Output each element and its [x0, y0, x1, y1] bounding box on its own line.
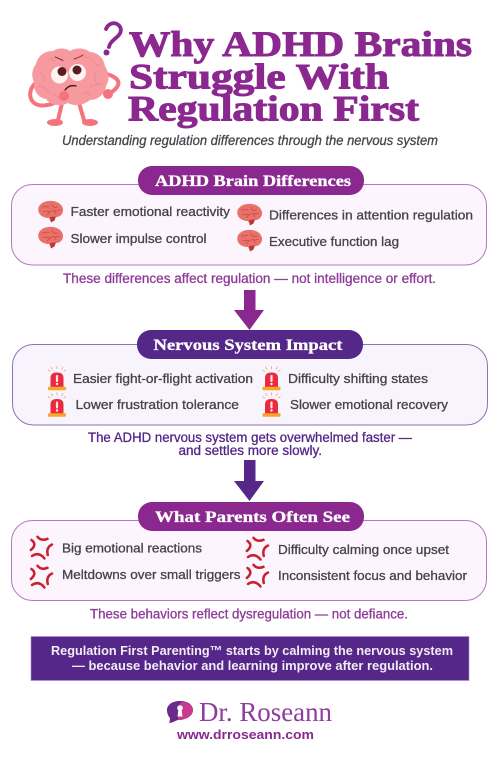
note: nervous system — [88, 430, 412, 458]
text: inconsistent focus and behavior: Inconsistent focus and behavior — [278, 568, 468, 583]
text: difficulty calming once upset: Difficulty calming once upset — [278, 542, 449, 557]
text: difficulty shifting states: Difficulty shifting states — [288, 371, 429, 386]
icon: siren — [262, 366, 280, 390]
text: meltdowns over small triggers: Meltdowns over small triggers — [62, 567, 241, 582]
callout: regulation first parenting — [31, 636, 469, 680]
note: behaviors: These behaviors reflect dysregulation — not defiance. — [90, 606, 408, 622]
icon: anger — [247, 538, 268, 560]
text: lower frustration tolerance: Lower frustration tolerance — [76, 397, 239, 412]
arrow: down purple — [234, 290, 264, 330]
title — [128, 24, 472, 128]
callout: regulation first parenting: Regulation First Parenting™ starts by calming the nervous system — [51, 643, 453, 658]
icon: brain — [38, 227, 63, 248]
title: Struggle With — [129, 56, 389, 96]
panel: what parents often see — [12, 502, 486, 600]
subtitle: Understanding regulation differences through the nervous system — [62, 132, 438, 148]
heading pill: What Parents Often See — [155, 509, 350, 526]
icon: logo speech bubble — [167, 701, 193, 723]
note: differences: These differences affect regulation — not intelligence or effort. — [63, 271, 436, 286]
text: differences in attention regulation: Differences in attention regulation — [269, 208, 473, 222]
icon: siren — [262, 392, 280, 417]
icon: question mark — [104, 23, 121, 56]
note: nervous system: The ADHD nervous system gets overwhelmed faster — — [88, 430, 412, 445]
text: big emotional reactions: Big emotional reactions — [62, 540, 203, 556]
title: Regulation First — [128, 88, 419, 128]
arrow: down indigo — [234, 460, 264, 501]
text: slower emotional recovery: Slower emotional recovery — [290, 397, 449, 412]
text: faster emotional reactivity: Faster emotional reactivity — [70, 204, 231, 219]
icon: anger — [31, 537, 52, 558]
note: nervous system: and settles more slowly. — [178, 443, 322, 458]
website url: www.drroseann.com — [176, 727, 314, 742]
icon: brain — [237, 204, 262, 226]
heading pill: Nervous System Impact — [154, 337, 343, 354]
text: executive function lag: Executive function lag — [269, 234, 399, 249]
icon: anger — [31, 566, 52, 588]
text: slower impulse control: Slower impulse control — [70, 231, 207, 246]
panel: nervous system impact — [12, 330, 488, 425]
heading pill: ADHD Brain Differences — [155, 173, 351, 190]
icon: thinking brain mascot — [30, 48, 118, 126]
icon: brain — [38, 201, 63, 222]
heading pill — [138, 166, 364, 195]
heading pill — [138, 502, 364, 531]
callout: regulation first parenting: — because behavior and learning improve after regulation. — [72, 658, 433, 673]
icon: brain — [237, 230, 262, 252]
heading pill — [137, 330, 363, 359]
panel: ADHD brain differences — [12, 166, 486, 265]
icon: anger — [247, 565, 268, 586]
icon: siren — [48, 392, 66, 417]
logo: Dr. Roseann: Dr. Roseann — [199, 697, 332, 727]
icon: siren — [48, 366, 66, 390]
text: easier fight-or-flight activation: Easier fight-or-flight activation — [73, 371, 253, 386]
title: Why ADHD Brains — [129, 24, 472, 64]
